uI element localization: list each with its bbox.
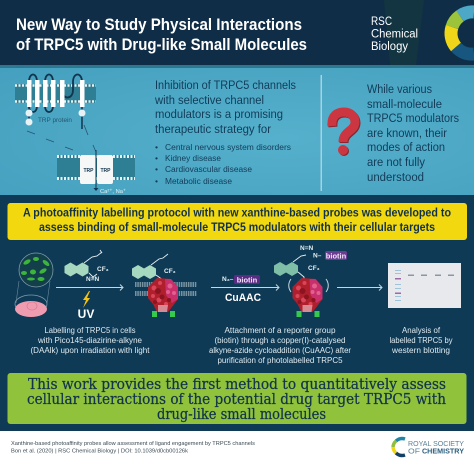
arrow: CuAAC step [211,284,279,290]
label: TRP protein: TRP protein [38,117,72,124]
logo wordmark: ROYAL SOCIETY [408,441,464,448]
icon: western blot gel [388,263,461,308]
icon: TRP channel in membrane: Ca²⁺, Na⁺ [100,188,126,195]
caption: step 3 [390,326,452,355]
text: citation [11,441,255,454]
list: diseases: Cardiovascular disease [165,164,252,174]
label: azide biotin reagent: biotin [237,276,258,284]
panel: dark method section [0,195,474,432]
icon: biotinylated probe on TRPC5: N=N [300,245,313,252]
icon: TRP channel in membrane [57,150,135,195]
logo wordmark: CHEMISTRY [422,448,464,456]
title: of TRPC5 with Drug-like Small Molecules [16,35,307,54]
icon: Royal Society of Chemistry logo [393,439,405,455]
arrow: western blot step [337,284,382,290]
callout: green conclusion box: This work provides the first method to quantitatively assess [28,375,446,393]
text: unknown modes of action: While various [367,82,432,96]
label: CuAAC: CuAAC [225,292,261,304]
icon: biotinylated probe on TRPC5: biotin [326,252,347,260]
journal name: Chemical [371,28,418,40]
caption: step 2 [209,326,351,365]
text: unknown modes of action: are not fully [367,155,426,169]
list: diseases: • [155,176,158,186]
icon: probe bound to TRPC5 in membrane [132,254,197,317]
icon: biotinylated probe on TRPC5 [274,245,347,317]
list: diseases: • [155,153,158,163]
title: New Way to Study Physical Interactions [16,15,302,34]
text: inhibition statement: with selective channel [154,93,264,107]
icon: biotinylated probe on TRPC5: CF₃ [308,265,320,272]
text: inhibition statement [154,78,296,136]
caption: step 1: (DAAlk) upon irradiation with light [30,346,150,355]
caption: step 1 [30,326,150,355]
journal name: Biology [371,41,408,53]
label: azide biotin reagent [222,275,260,284]
text: citation: Xanthine-based photoaffinity probes allow assessment of ligand engagement by TRPC5 channels [11,441,255,447]
list: diseases: Kidney disease [165,153,221,163]
caption: step 3: Analysis of [402,326,441,335]
icon: biotinylated probe on TRPC5: N– [313,252,322,260]
logo wordmark [408,441,464,456]
caption: step 2: (biotin) through a copper(I)-catalysed [214,336,346,345]
icon: TRP channel in membrane: TRP [100,168,111,174]
panel: teal background [0,68,474,195]
text: inhibition statement: Inhibition of TRPC5 channels [155,78,296,92]
icon: diazirine-alkyne probe: CF₃ [97,266,109,273]
icon: diazirine-alkyne probe: N=N [86,276,99,283]
callout: green conclusion box [8,373,466,424]
callout: yellow protocol box [8,203,467,240]
callout: green conclusion box: drug-like small molecules [157,405,326,423]
list: diseases: • [155,142,158,152]
text: inhibition statement: therapeutic strategy for [155,122,271,136]
panel: footer [0,431,474,462]
text: unknown modes of action: understood [367,170,424,184]
text: unknown modes of action: modes of action [367,140,445,154]
list: diseases: • [155,164,158,174]
arrow: UV step [56,284,123,290]
text: inhibition statement: modulators is a promising [155,107,283,121]
text: unknown modes of action: are known, their [367,126,447,140]
icon: diazirine-alkyne probe [64,250,109,283]
list: diseases: Central nervous system disorders [165,142,291,152]
caption: step 3: western blotting [391,346,450,355]
caption: step 2: purification of photolabelled TRPC5 [218,356,343,365]
list: diseases [155,142,291,186]
title [16,15,307,54]
logo wordmark: OF [408,448,420,456]
caption: step 2: alkyne-azide cycloaddition (CuAAC) after [209,346,351,355]
text: unknown modes of action: small-molecule [367,97,442,111]
label: UV: UV [78,307,94,321]
caption: step 1: Labelling of TRPC5 in cells [44,326,136,335]
caption: step 1: with Pico145-diazirine-alkyne [37,336,143,345]
text: unknown modes of action: TRPC5 modulators [367,111,459,125]
text: citation: Bon et al. (2020) | RSC Chemical Biology | DOI: 10.1039/d0cb00126k [11,448,188,454]
icon: question mark [332,112,356,156]
icon: cells and petri dish [15,253,53,317]
caption: step 2: Attachment of a reporter group [224,326,336,335]
icon: journal logo ring [451,12,474,54]
list: diseases: Metabolic disease [165,176,232,186]
icon: TRP protein membrane diagram [15,74,96,152]
icon: lightning bolt [83,291,90,308]
journal name: RSC [371,16,392,28]
header band [0,0,474,68]
caption: step 3: labelled TRPC5 by [390,336,452,345]
icon: probe bound to TRPC5 in membrane: CF₃ [164,268,176,275]
icon: TRP channel in membrane: TRP [84,168,94,174]
text: unknown modes of action [367,82,459,184]
journal name [371,16,418,53]
label: azide biotin reagent: N₃– [222,276,234,283]
